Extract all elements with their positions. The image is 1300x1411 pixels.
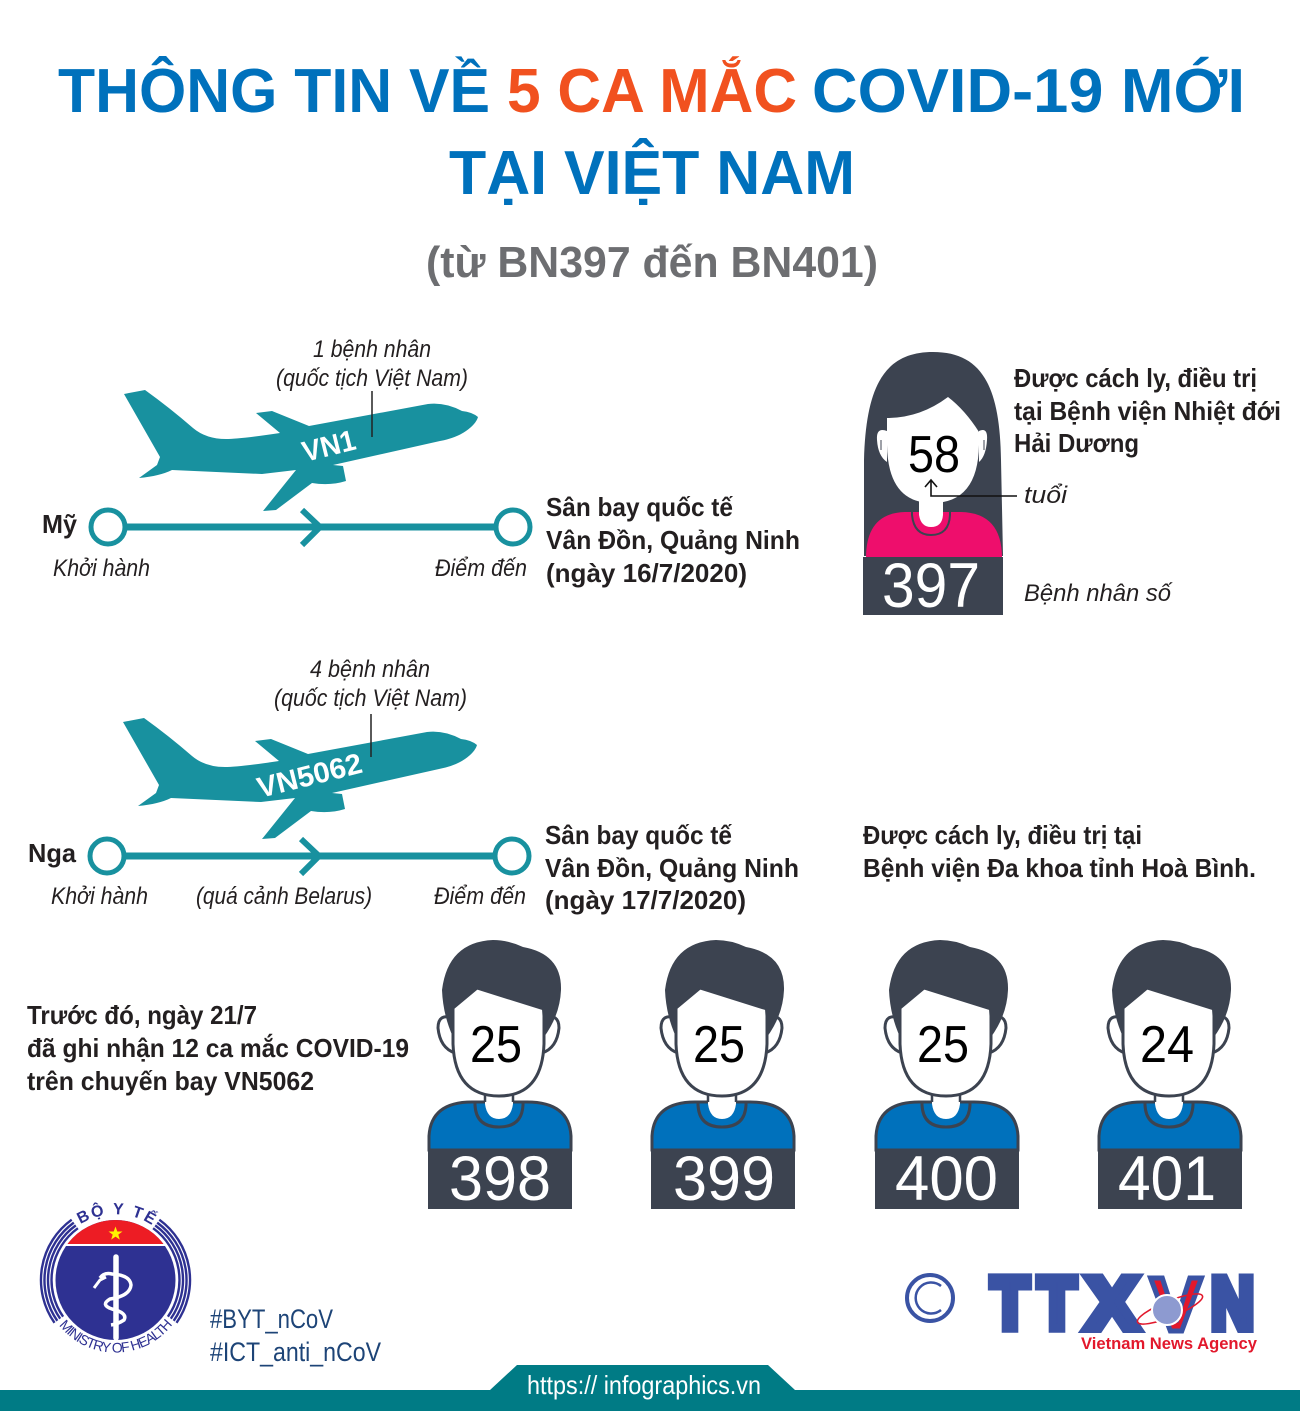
treatment text: Được cách ly, điều trị — [1014, 363, 1257, 393]
airport text — [545, 820, 799, 915]
patient number label: Bệnh nhân số — [1024, 580, 1174, 607]
arrow: age pointer — [925, 480, 1017, 496]
patient 401 — [1098, 940, 1242, 1214]
origin label: Nga — [28, 838, 77, 868]
airport text: Sân bay quốc tế — [546, 492, 733, 522]
treatment text: Hoa Binh: Bệnh viện Đa khoa tỉnh Hoà Bình. — [863, 853, 1256, 883]
patient note: (quốc tịch Việt Nam) — [274, 685, 467, 712]
age number: 58 — [908, 426, 960, 484]
destination label: Điểm đến — [434, 883, 526, 910]
panel: flight VN1 — [42, 336, 800, 588]
destination label: Điểm đến — [435, 555, 527, 582]
airplane VN5062 — [123, 714, 477, 839]
footer bar — [0, 1365, 1300, 1411]
hashtags — [210, 1304, 381, 1367]
hashtags: #ICT_anti_nCoV — [210, 1337, 381, 1367]
patient 399: 25 — [693, 1016, 745, 1074]
title: 5 CA MẮC — [507, 57, 797, 126]
patient 401: 401 — [1118, 1144, 1216, 1214]
treatment text: Hoa Binh — [863, 820, 1256, 883]
treatment text — [1014, 363, 1281, 458]
airplane VN1 — [124, 390, 478, 511]
patient note — [274, 656, 467, 712]
note: earlier cases: đã ghi nhận 12 ca mắc COVID-19 — [27, 1033, 409, 1063]
patient note: (quốc tịch Việt Nam) — [276, 365, 468, 392]
logo: TTXVN: T — [991, 1264, 1029, 1344]
title: TẠI VIỆT NAM — [449, 139, 855, 208]
patient 399 — [651, 940, 795, 1214]
title: COVID-19 MỚI — [812, 57, 1245, 126]
treatment text: Hoa Binh: Được cách ly, điều trị tại — [863, 820, 1142, 850]
airport text: Sân bay quốc tế — [545, 820, 732, 850]
patient 399: 399 — [673, 1144, 775, 1214]
airport text — [546, 492, 800, 588]
route line — [90, 839, 529, 874]
airport text: (ngày 16/7/2020) — [546, 558, 747, 588]
route line — [91, 510, 530, 545]
logo: TTXVN: X — [1086, 1264, 1138, 1344]
note: earlier cases: trên chuyến bay VN5062 — [27, 1066, 314, 1096]
airplane VN5062: VN5062 — [254, 748, 366, 805]
patient note: 1 bệnh nhân — [313, 336, 431, 363]
departure label: Khởi hành — [51, 883, 148, 910]
icon: woman figure — [863, 352, 1003, 615]
origin label: Mỹ — [42, 509, 78, 539]
logo: TTXVN: T — [1038, 1264, 1076, 1344]
logo: TTXVN: N — [1211, 1264, 1254, 1344]
subtitle: (từ BN397 đến BN401) — [426, 238, 878, 287]
logo: TTXVN: V — [1150, 1262, 1202, 1348]
logo: Ministry of Health: MINISTRY OF HEALTH — [60, 1318, 172, 1353]
treatment text: tại Bệnh viện Nhiệt đới — [1014, 396, 1281, 426]
patient 400: 25 — [917, 1016, 969, 1074]
departure label: Khởi hành — [53, 555, 150, 582]
panel: flight VN5062 — [28, 656, 799, 915]
patient 401: 24 — [1140, 1016, 1194, 1074]
logo: TTXVN: Vietnam News Agency — [1081, 1334, 1258, 1353]
footer bar: https:// infographics.vn — [527, 1370, 761, 1400]
note: earlier cases — [27, 1000, 409, 1096]
patient 398: 25 — [470, 1016, 522, 1074]
airport text: (ngày 17/7/2020) — [545, 885, 746, 915]
logo: TTXVN — [991, 1262, 1258, 1353]
logo: Ministry of Health: BỘ Y TẾ — [76, 1202, 158, 1225]
age label: tuổi — [1024, 482, 1068, 509]
note: earlier cases: Trước đó, ngày 21/7 — [27, 1000, 257, 1030]
patient note — [276, 336, 468, 392]
airport text: Vân Đồn, Quảng Ninh — [545, 853, 799, 883]
patient 400: 400 — [895, 1144, 998, 1214]
copyright symbol — [907, 1275, 953, 1321]
patient note: 4 bệnh nhân — [310, 656, 430, 683]
airport text: Vân Đồn, Quảng Ninh — [546, 525, 800, 555]
patient number: 397 — [882, 551, 980, 621]
patient 398 — [428, 940, 572, 1214]
transit label: (quá cảnh Belarus) — [196, 883, 372, 910]
airplane VN1: VN1 — [299, 425, 359, 469]
patient 398: 398 — [449, 1144, 551, 1214]
title: THÔNG TIN VỀ — [58, 57, 490, 126]
hashtags: #BYT_nCoV — [210, 1304, 333, 1334]
logo: Ministry of Health — [40, 1202, 192, 1353]
patient 400 — [875, 940, 1019, 1214]
title — [58, 57, 1245, 208]
panel: patient 397 — [863, 352, 1281, 621]
treatment text: Hải Dương — [1014, 428, 1139, 458]
